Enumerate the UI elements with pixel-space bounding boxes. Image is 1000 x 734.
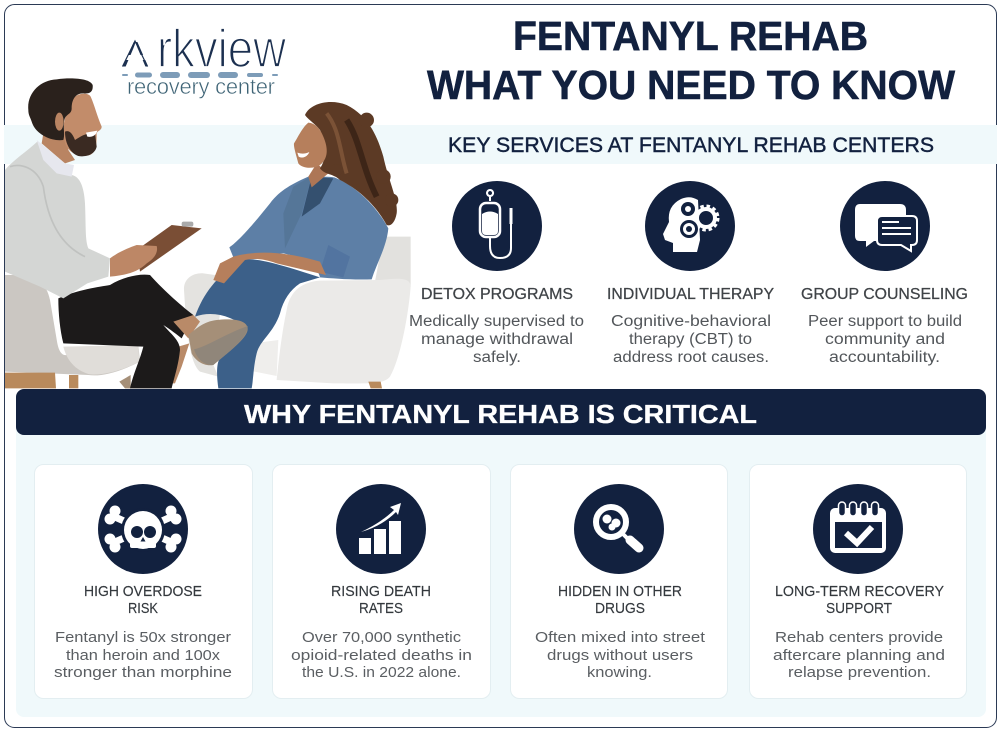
card: rising death rates bbox=[272, 464, 490, 698]
description: therapy (CBT) to bbox=[629, 331, 752, 348]
icon: speech bubbles bbox=[840, 181, 930, 271]
title: FENTANYL REHAB bbox=[513, 13, 868, 59]
section heading: key services: KEY SERVICES AT FENTANYL REHAB CENTERS bbox=[448, 133, 934, 157]
description bbox=[291, 629, 472, 681]
description: manage withdrawal bbox=[421, 331, 573, 348]
icon: rising bar chart bbox=[336, 484, 426, 574]
description: Fentanyl is 50x stronger bbox=[55, 629, 231, 646]
shirt placket and cuff bbox=[302, 177, 333, 217]
key services band bbox=[4, 125, 997, 164]
heading bbox=[558, 584, 682, 617]
description: address root causes. bbox=[613, 349, 769, 366]
icon: magnifier over pills bbox=[574, 484, 664, 574]
client shirt bbox=[229, 177, 388, 279]
heading: GROUP COUNSELING bbox=[801, 286, 968, 303]
left chair bbox=[5, 275, 140, 388]
description: Medically supervised to bbox=[409, 313, 584, 330]
client forearm and hand bbox=[213, 253, 326, 283]
description: opioid-related deaths in bbox=[291, 647, 472, 664]
title bbox=[427, 13, 955, 108]
heading: HIDDEN IN OTHER bbox=[558, 584, 682, 600]
description: Over 70,000 synthetic bbox=[302, 629, 462, 646]
photo illustration: counselor and client bbox=[5, 78, 411, 388]
service: group counseling bbox=[801, 181, 968, 366]
heading: HIGH OVERDOSE bbox=[84, 584, 202, 600]
clipboard bbox=[137, 225, 202, 272]
description: Often mixed into street bbox=[535, 629, 706, 646]
icon: calendar check bbox=[813, 484, 903, 574]
description: relapse prevention. bbox=[788, 664, 931, 681]
heading: LONG-TERM RECOVERY bbox=[775, 584, 944, 600]
shoe bbox=[188, 319, 248, 365]
banner: why rehab is critical: WHY FENTANYL REHAB IS CRITICAL bbox=[244, 399, 757, 429]
counselor lower shoe bbox=[119, 375, 131, 388]
heading: RATES bbox=[359, 601, 403, 617]
description: Rehab centers provide bbox=[775, 629, 943, 646]
heading bbox=[84, 584, 202, 617]
counselor collar bbox=[37, 140, 74, 177]
heading: DRUGS bbox=[595, 601, 645, 617]
client face bbox=[294, 123, 327, 168]
counselor hand bbox=[110, 245, 157, 277]
description: Cognitive-behavioral bbox=[611, 313, 771, 330]
description: accountability. bbox=[829, 349, 940, 366]
card: hidden in other drugs bbox=[510, 464, 728, 698]
heading: SUPPORT bbox=[826, 601, 892, 617]
heading: RISK bbox=[128, 601, 158, 617]
counselor head bbox=[28, 78, 102, 156]
icon: IV bag bbox=[452, 181, 542, 271]
card: long-term recovery support bbox=[750, 464, 966, 698]
heading: DETOX PROGRAMS bbox=[421, 286, 573, 303]
counselor neck bbox=[42, 133, 75, 163]
logo: recovery center bbox=[127, 74, 275, 99]
description: the U.S. in 2022 alone. bbox=[302, 664, 461, 681]
icon: skull and crossbones bbox=[98, 484, 188, 574]
heading bbox=[331, 584, 431, 617]
description bbox=[773, 629, 945, 681]
description: safely. bbox=[473, 349, 521, 366]
logo: rkview bbox=[157, 19, 287, 79]
heading bbox=[775, 584, 944, 617]
logo: A bbox=[122, 34, 149, 75]
description bbox=[611, 313, 771, 366]
counselor lower ankle bbox=[172, 343, 189, 383]
description: drugs without users bbox=[547, 647, 693, 664]
icon: head with gears bbox=[645, 181, 735, 271]
description: Peer support to build bbox=[808, 313, 962, 330]
title: WHAT YOU NEED TO KNOW bbox=[427, 62, 955, 108]
description: than heroin and 100x bbox=[66, 647, 221, 664]
description bbox=[535, 629, 706, 681]
description bbox=[54, 629, 232, 681]
panel: why rehab is critical bbox=[16, 420, 986, 717]
right chair bbox=[184, 237, 411, 388]
banner: why rehab is critical bbox=[16, 389, 986, 435]
description bbox=[409, 313, 584, 366]
description: stronger than morphine bbox=[54, 664, 232, 681]
client hair bbox=[305, 102, 398, 225]
heading: INDIVIDUAL THERAPY bbox=[607, 286, 774, 303]
logo bbox=[122, 19, 287, 99]
client neck bbox=[308, 163, 328, 187]
service: individual therapy bbox=[607, 181, 774, 366]
counselor sweater bbox=[5, 142, 110, 298]
client jeans bbox=[195, 259, 320, 388]
description: aftercare planning and bbox=[773, 647, 945, 664]
description: community and bbox=[825, 331, 945, 348]
description bbox=[808, 313, 962, 366]
counselor trousers bbox=[58, 275, 193, 388]
description: knowing. bbox=[587, 664, 652, 681]
service: detox programs bbox=[409, 181, 584, 366]
ankle bbox=[173, 315, 200, 338]
card: high overdose risk bbox=[34, 464, 252, 698]
heading: RISING DEATH bbox=[331, 584, 431, 600]
